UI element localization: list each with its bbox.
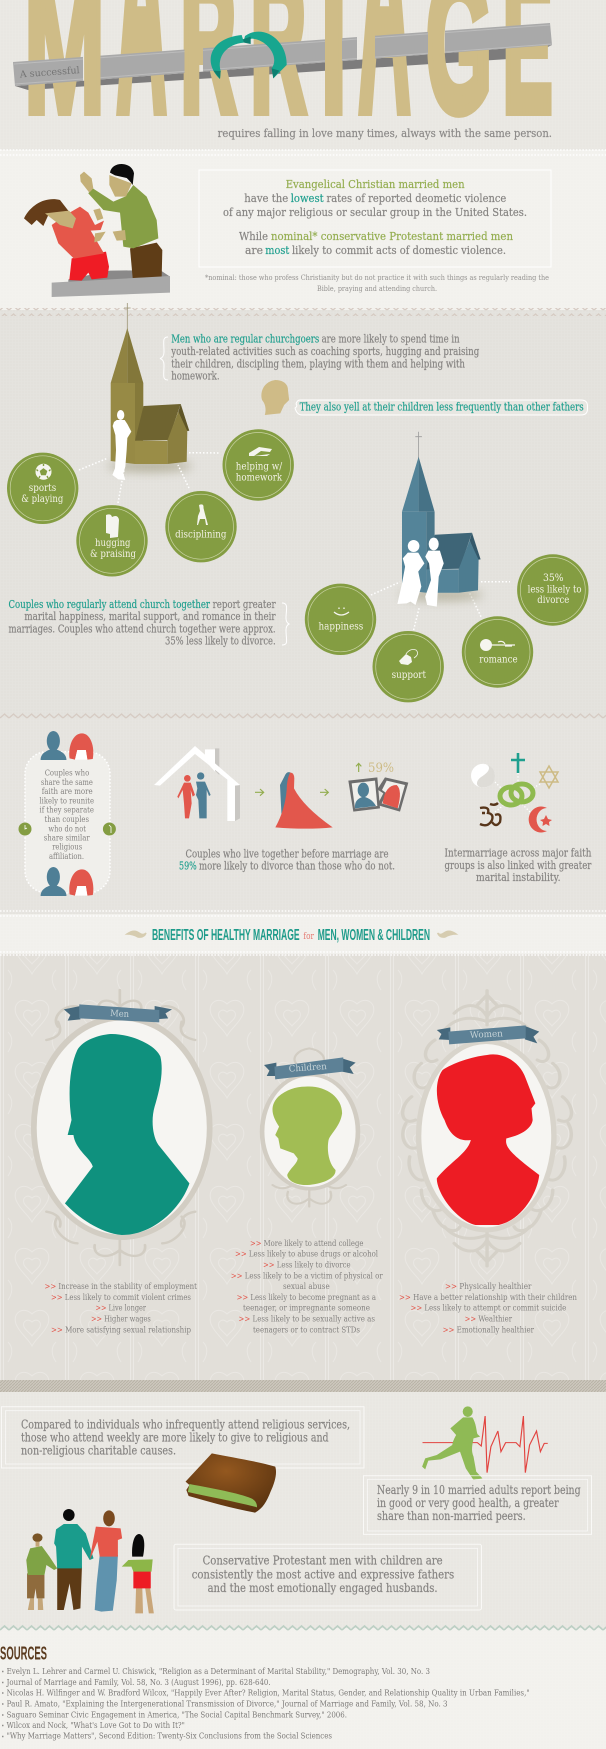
panel: married adults health bbox=[364, 1476, 592, 1534]
panel: children portrait bbox=[260, 1048, 360, 1207]
icon: hands bbox=[399, 654, 412, 665]
ribbon bbox=[264, 1057, 356, 1079]
icon: hug bbox=[106, 514, 119, 538]
footnote bbox=[205, 273, 549, 293]
panel: couples sharing the same faith: likely to reunite bbox=[40, 796, 94, 805]
badge: romance: romance bbox=[479, 654, 518, 666]
badge: 35% less likely to divorce: less likely to bbox=[528, 583, 582, 595]
stat arrow bbox=[356, 763, 361, 772]
list: sources bbox=[2, 1666, 530, 1741]
icon: wedding rings bbox=[500, 784, 533, 805]
illustration: runner with heartbeat bbox=[422, 1406, 548, 1480]
text: couples attending church bbox=[8, 598, 289, 648]
badge: hugging and praising: & praising bbox=[90, 548, 136, 560]
illustration: olive church with man bbox=[108, 303, 192, 480]
badge: disciplining bbox=[165, 491, 237, 562]
panel: women portrait bbox=[403, 991, 571, 1266]
text: couples attending church: Couples who regularly attend church together bbox=[8, 598, 211, 611]
list: benefits for children: >> Less likely to be sexually active as bbox=[238, 1314, 375, 1324]
illustration: faith symbols and rings: marital instability. bbox=[476, 871, 560, 884]
ribbon bbox=[64, 1004, 172, 1022]
badge: hugging and praising bbox=[76, 505, 148, 576]
illustration: family from behind bbox=[26, 1509, 154, 1613]
illustration: blue church with couple bbox=[397, 432, 483, 607]
panel: couples sharing the same faith: if they separate bbox=[40, 806, 94, 815]
badge: helping with homework: homework bbox=[236, 471, 283, 483]
heading: sources: SOURCES bbox=[0, 1643, 47, 1663]
icon: head silhouette bbox=[261, 380, 289, 415]
icon: soccer ball bbox=[36, 464, 52, 480]
list: sources: Journal of Marriage and Family, Vol. 58, No. 3 (August 1996), pp. 628-640. bbox=[6, 1677, 271, 1687]
badge: helping with homework: helping w/ bbox=[236, 460, 283, 472]
panel: domestic violence statistics: Evangelical Christian married men bbox=[286, 177, 465, 191]
list: benefits for children: >> More likely to attend college bbox=[250, 1238, 363, 1248]
panel: couples sharing the same faith: share similar bbox=[44, 833, 90, 842]
panel: couples sharing the same faith: religious bbox=[52, 843, 82, 852]
list: sources: Saguaro Seminar Civic Engagement in America, "The Social Capital Benchmark Survey," 2006. bbox=[7, 1709, 347, 1719]
panel: charitable giving bbox=[2, 1407, 364, 1468]
text: regular churchgoers: youth-related activities such as coaching sports, hugging and praising bbox=[170, 345, 479, 358]
silhouette: woman bbox=[437, 1054, 539, 1225]
badge: sports and playing: & playing bbox=[21, 493, 64, 505]
panel: men portrait: Men bbox=[110, 1009, 130, 1020]
badge: happiness bbox=[305, 584, 376, 655]
panel: couples sharing the same faith: who do not bbox=[48, 824, 87, 833]
icon: wallet bbox=[186, 1453, 276, 1513]
panel: conservative protestant fathers: Conservative Protestant men with children are bbox=[203, 1553, 443, 1567]
list: sources: Nicolas H. Wilfinger and W. Bradford Wilcox, "Happily Ever After? Religion, Marital Status, Gender, and Relationship Quality in Urban Families," bbox=[7, 1688, 530, 1698]
badge: 35% less likely to divorce: 35% bbox=[543, 572, 564, 584]
list: benefits for men: >> More satisfying sexual relationship bbox=[51, 1324, 191, 1334]
silhouette: child bbox=[272, 1087, 342, 1185]
tagline on beam: A successful bbox=[18, 65, 80, 81]
badge: happiness: happiness bbox=[318, 620, 363, 632]
list: benefits for children bbox=[231, 1238, 383, 1334]
heading: benefits of healthy marriage: BENEFITS OF HEALTHY MARRIAGE bbox=[152, 927, 300, 944]
text: regular churchgoers bbox=[160, 333, 479, 383]
silhouette: man bbox=[112, 410, 131, 480]
panel: domestic violence statistics: While bbox=[239, 229, 268, 243]
panel: charitable giving: Compared to individuals who infrequently attend religious services, bbox=[21, 1417, 350, 1431]
text: couples attending church: marital happiness, marital support, and romance in their bbox=[24, 610, 276, 623]
icon: wedding ring over beam bbox=[211, 32, 287, 79]
panel: married adults health: share than non-married peers. bbox=[377, 1509, 526, 1523]
list: benefits for children: teenagers or to contract STDs bbox=[253, 1324, 360, 1334]
panel: men portrait bbox=[31, 990, 213, 1265]
list: benefits for children: >> Less likely to become pregnant as a bbox=[237, 1292, 376, 1302]
icon: top couple bbox=[41, 731, 93, 760]
heading: benefits of healthy marriage: for bbox=[303, 932, 315, 942]
list: benefits for men bbox=[44, 1281, 198, 1334]
panel: domestic violence statistics: likely to commit acts of domestic violence. bbox=[292, 243, 506, 257]
badge: 35% less likely to divorce bbox=[517, 554, 588, 626]
list: sources: "Why Marriage Matters", Second Edition: Twenty-Six Conclusions from the Social Sciences bbox=[7, 1731, 332, 1741]
panel: couples sharing the same faith: Couples who bbox=[45, 769, 89, 778]
badge: support bbox=[372, 631, 444, 702]
list: benefits for children: sexual abuse bbox=[283, 1281, 330, 1291]
panel: couples sharing the same faith: faith are more bbox=[42, 787, 93, 796]
icon: yin yang bbox=[471, 764, 495, 788]
badge: 35% less likely to divorce: divorce bbox=[537, 594, 569, 606]
footnote: Bible, praying and attending church. bbox=[317, 284, 437, 293]
dotted connectors bbox=[79, 453, 510, 630]
list: benefits for children: >> Less likely to abuse drugs or alcohol bbox=[235, 1249, 378, 1259]
panel: couples sharing the same faith: affiliation. bbox=[49, 852, 84, 861]
panel: conservative protestant fathers bbox=[174, 1544, 482, 1610]
panel: conservative protestant fathers: consistently the most active and expressive fathers bbox=[192, 1567, 454, 1581]
list: sources: Wilcox and Nock, "What's Love Got to Do with It?" bbox=[7, 1720, 185, 1730]
text: couples attending church: marriages. Couples who attend church together were approx. bbox=[8, 622, 276, 635]
icon: torn photo pair bbox=[348, 777, 408, 812]
text: regular churchgoers: their children, discipling them, playing with them and helping with bbox=[171, 357, 465, 370]
panel: domestic violence statistics: most bbox=[265, 243, 290, 257]
list: benefits for children: >> Less likely to divorce bbox=[263, 1260, 351, 1270]
text: regular churchgoers: homework. bbox=[171, 370, 220, 383]
icon: cross bbox=[511, 753, 525, 773]
list: benefits for women: >> Have a better relationship with their children bbox=[399, 1292, 578, 1302]
illustration: cohabiting couple to wedding to divorce: Couples who live together before marriage are bbox=[186, 847, 388, 860]
illustration: faith symbols and rings bbox=[444, 753, 592, 884]
panel: domestic violence statistics: rates of reported deometic violence bbox=[326, 191, 506, 205]
list: benefits for men: >> Less likely to commit violent crimes bbox=[51, 1292, 191, 1302]
panel: children portrait: Children bbox=[289, 1062, 327, 1075]
list: sources: Evelyn L. Lehrer and Carmel U. Chiswick, "Religion as a Determinant of Marital Stability," Demography, Vol. 30, No. 3 bbox=[7, 1666, 430, 1676]
list: sources: Paul R. Amato, "Explaining the Intergenerational Transmission of Divorce," Journal of Marriage and Family, Vol. 58, No. 3 bbox=[7, 1698, 448, 1708]
icon: star of david bbox=[540, 766, 558, 788]
text: couples attending church: report greater bbox=[213, 598, 276, 611]
icon: om symbol bbox=[480, 803, 500, 825]
illustration: cohabiting couple to wedding to divorce bbox=[154, 746, 408, 873]
badge: sports and playing: sports bbox=[29, 482, 56, 494]
panel: domestic violence statistics: have the bbox=[244, 191, 288, 205]
list: benefits for women: >> Emotionally healthier bbox=[443, 1324, 534, 1334]
list: benefits for women: >> Less likely to attempt or commit suicide bbox=[410, 1303, 566, 1313]
illustration: man striking woman on grey pedestal bbox=[24, 164, 170, 297]
panel: domestic violence statistics: lowest bbox=[291, 191, 324, 205]
illustration: cohabiting couple to wedding to divorce: 59% bbox=[368, 761, 394, 776]
badge: romance bbox=[462, 616, 533, 688]
icon: clock dots bbox=[18, 822, 116, 836]
panel: conservative protestant fathers: and the most emotionally engaged husbands. bbox=[208, 1581, 438, 1595]
badge: disciplining: disciplining bbox=[175, 528, 227, 540]
icon: child on chair bbox=[197, 504, 208, 525]
subtitle: requires falling in love many times, always with the same person. bbox=[218, 126, 552, 140]
panel: domestic violence statistics bbox=[199, 170, 551, 293]
arrows bbox=[255, 789, 328, 796]
silhouette: couple bbox=[397, 538, 444, 607]
list: benefits for women bbox=[399, 1281, 578, 1334]
title: MARRIAGE lettering with beam and ring bbox=[13, 0, 552, 179]
text: regular churchgoers: Men who are regular churchgoers bbox=[171, 333, 319, 346]
panel: women portrait: Women bbox=[470, 1029, 503, 1041]
list: benefits for men: >> Higher wages bbox=[91, 1314, 151, 1324]
list: benefits for children: >> Less likely to be a victim of physical or bbox=[231, 1270, 383, 1280]
panel: charitable giving: non-religious charitable causes. bbox=[21, 1443, 176, 1457]
text: regular churchgoers: are more likely to spend time in bbox=[322, 333, 460, 346]
icon: smile bbox=[334, 608, 349, 615]
footnote: *nominal: those who profess Christianity but do not practice it with such things as regularly reading the bbox=[205, 273, 549, 282]
icon: book bbox=[249, 447, 272, 456]
silhouette: man bbox=[65, 1034, 189, 1235]
list: benefits for children: teenager, or impregnante someone bbox=[243, 1303, 370, 1313]
frame ornament bbox=[273, 1048, 346, 1207]
panel: domestic violence statistics: nominal* conservative Protestant married men bbox=[271, 229, 514, 243]
badge: hugging and praising: hugging bbox=[95, 537, 131, 549]
panel: married adults health: in good or very good health, a greater bbox=[377, 1496, 559, 1510]
panel: charitable giving: those who attend weekly are more likely to give to religious and bbox=[21, 1430, 329, 1444]
icon: bride and groom bbox=[275, 772, 333, 829]
icon: crescent and star bbox=[529, 806, 552, 832]
icon: rose bbox=[480, 639, 492, 651]
frame ornament bbox=[46, 990, 195, 1265]
badge: helping with homework bbox=[223, 429, 294, 501]
badge: support: support bbox=[392, 669, 427, 681]
list: benefits for men: >> Increase in the stability of employment bbox=[44, 1281, 198, 1291]
illustration: cohabiting couple to wedding to divorce: 59% bbox=[179, 860, 197, 873]
illustration: cohabiting couple to wedding to divorce: more likely to divorce than those who do not. bbox=[199, 860, 395, 873]
panel: couples sharing the same faith bbox=[18, 731, 116, 896]
panel: couples sharing the same faith: share the same bbox=[41, 778, 93, 787]
text: couples attending church: 35% less likely to divorce. bbox=[165, 635, 276, 648]
icon: house with couple bbox=[154, 746, 240, 821]
ribbon bbox=[437, 1025, 539, 1044]
panel: domestic violence statistics: are bbox=[245, 243, 263, 257]
list: benefits for women: >> Physically healthier bbox=[445, 1281, 532, 1291]
list: benefits for men: >> Live longer bbox=[96, 1303, 146, 1313]
icon: bottom couple bbox=[41, 867, 93, 896]
heading: benefits of healthy marriage: MEN, WOMEN & CHILDREN bbox=[318, 927, 430, 944]
badge: sports and playing bbox=[7, 453, 78, 524]
panel: domestic violence statistics: of any major religious or secular group in the United States. bbox=[223, 205, 527, 219]
list: benefits for women: >> Wealthier bbox=[465, 1314, 512, 1324]
panel: couples sharing the same faith: than couples bbox=[44, 815, 89, 824]
frame ornament bbox=[403, 991, 571, 1266]
